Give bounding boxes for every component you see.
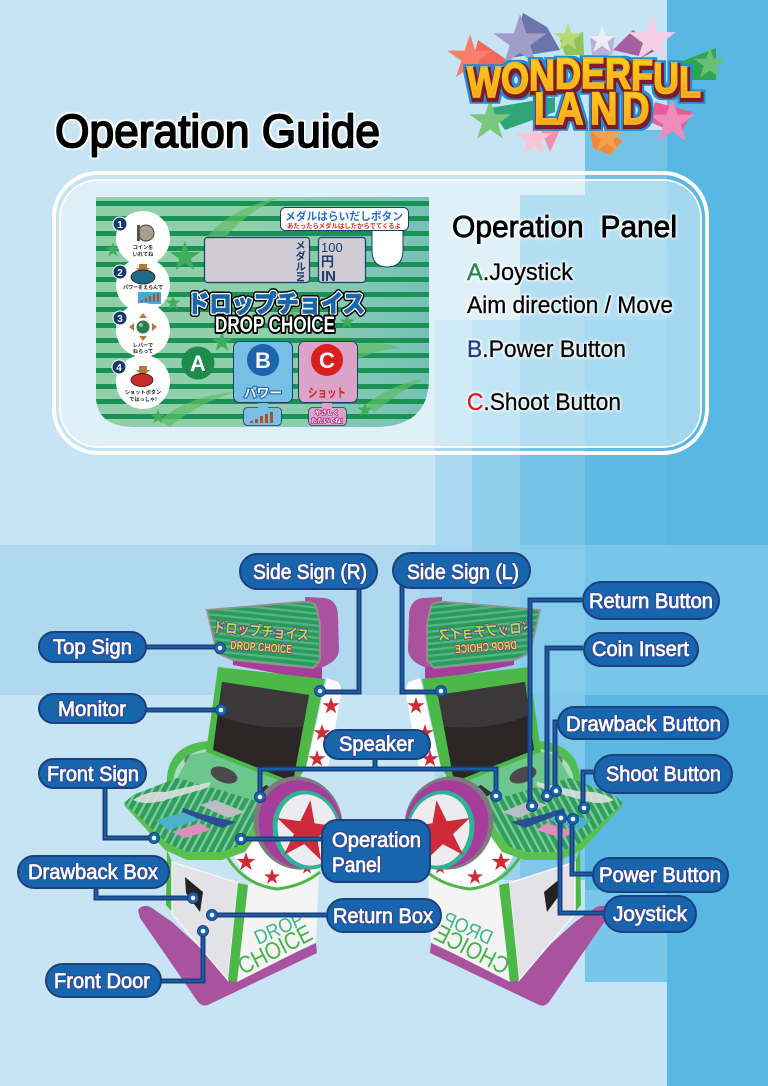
panel legend text: Aim direction / Move bbox=[467, 292, 673, 319]
callout: Joystick: Joystick bbox=[613, 903, 687, 926]
callout: Speaker: Speaker bbox=[339, 733, 414, 756]
100 yen slot: IN bbox=[321, 268, 336, 285]
callout: Top Sign: Top Sign bbox=[53, 636, 132, 659]
callout: Coin Insert bbox=[542, 633, 698, 802]
step 3: aim with lever: レバーで bbox=[133, 342, 153, 349]
medal payout button label: あたったらメダルはしたからでてくるよ bbox=[287, 221, 401, 230]
callout: Monitor: Monitor bbox=[58, 698, 126, 721]
callout: Shoot Button bbox=[578, 755, 732, 814]
medal payout button label: メダルはらいだしボタン bbox=[285, 209, 403, 223]
callout: Operation Panel bbox=[236, 820, 430, 882]
game logo: Drop Choice: ドロップチョイス bbox=[187, 291, 365, 318]
button B: power bbox=[234, 342, 292, 426]
game logo: Drop Choice bbox=[187, 291, 365, 337]
cabinet: left machine: DROP bbox=[251, 908, 308, 950]
medal in slot: メダルIN bbox=[294, 240, 306, 282]
button C: shoot: ショット bbox=[308, 386, 346, 400]
cabinet: right machine (mirrored): ドロップチョイス bbox=[437, 619, 534, 644]
callout: Side Sign (R): Side Sign (R) bbox=[253, 561, 367, 584]
callout: Side Sign (L): Side Sign (L) bbox=[407, 561, 519, 584]
logo: Wonderful Land bbox=[447, 13, 726, 155]
callout: Power Button bbox=[568, 814, 728, 892]
panel legend text: A.Joystick bbox=[467, 259, 574, 286]
game logo: Drop Choice: ドロップチョイス bbox=[187, 291, 365, 318]
button B: power: パワー bbox=[244, 386, 282, 400]
cabinet: right machine (mirrored) bbox=[391, 597, 623, 1006]
medal payout button label bbox=[280, 208, 408, 267]
striped green background bbox=[96, 197, 429, 428]
panel: operation panel frame bbox=[54, 173, 707, 453]
callout: Power Button: Power Button bbox=[599, 864, 721, 887]
callout: Shoot Button: Shoot Button bbox=[606, 763, 721, 786]
step 1: insert coin: 1 bbox=[117, 220, 123, 231]
button A marker: A bbox=[190, 351, 206, 376]
cabinet: right machine (mirrored): DROP CHOICE bbox=[454, 638, 517, 656]
cabinet: right machine (mirrored): CHOICE bbox=[430, 920, 514, 980]
step 2: choose power: パワーをえらんで bbox=[123, 284, 163, 291]
game logo: Drop Choice: ドロップチョイス bbox=[187, 291, 365, 318]
title: Operation Guide: Operation Guide bbox=[55, 105, 380, 157]
step 3: aim with lever bbox=[113, 303, 170, 357]
wordmark bbox=[467, 50, 701, 134]
cabinet: left machine bbox=[124, 597, 356, 1006]
wordmark: WONDERFUL bbox=[467, 50, 701, 107]
callout: Drawback Box bbox=[18, 856, 198, 904]
step 4: press shoot: 4 bbox=[116, 363, 122, 374]
callout: Monitor bbox=[39, 694, 226, 723]
step 2: choose power bbox=[113, 258, 170, 312]
step 1: insert coin: コインを bbox=[133, 243, 153, 251]
100 yen slot: 円 bbox=[321, 254, 334, 269]
button C: shoot: C bbox=[319, 348, 335, 373]
panel legend text: Operation Panel bbox=[452, 209, 677, 244]
cabinet: left machine: ドロップチョイス bbox=[213, 619, 310, 644]
callout: Side Sign (L) bbox=[393, 553, 530, 696]
panel legend text: C.Shoot Button bbox=[467, 389, 621, 416]
step 4: press shoot: ではっしゃ! bbox=[129, 396, 157, 403]
100 yen slot: 100 bbox=[321, 240, 343, 255]
step 1: insert coin bbox=[113, 211, 170, 265]
callout: Operation Panel: Operation bbox=[332, 829, 421, 852]
callout: Front Sign bbox=[39, 759, 160, 844]
stars behind the logo wordmark bbox=[447, 13, 726, 155]
step 2: choose power: 2 bbox=[117, 268, 123, 279]
wordmark: LAND bbox=[534, 83, 649, 134]
callout: Drawback Box: Drawback Box bbox=[28, 861, 158, 884]
button B: power: B bbox=[255, 348, 271, 373]
panel legend text bbox=[452, 209, 677, 416]
cabinet: left machine: DROP CHOICE bbox=[230, 638, 293, 656]
callout: Speaker bbox=[254, 730, 502, 802]
callout: Drawback Button: Drawback Button bbox=[566, 713, 721, 736]
button A marker bbox=[182, 346, 214, 380]
game logo: Drop Choice: DROP CHOICE bbox=[215, 312, 335, 337]
100 yen slot bbox=[318, 238, 366, 285]
step 4: press shoot: ショットボタン bbox=[125, 388, 161, 396]
callout: Return Box bbox=[206, 899, 441, 932]
step 1: insert coin: いれてね bbox=[133, 251, 154, 258]
callout: Drawback Button bbox=[550, 707, 728, 796]
button C: shoot: やさしく bbox=[315, 409, 339, 417]
callout: Front Door bbox=[46, 926, 208, 997]
callout: Return Button: Return Button bbox=[589, 590, 713, 613]
callout: Coin Insert: Coin Insert bbox=[592, 638, 689, 661]
step 3: aim with lever: ねらって bbox=[133, 348, 153, 355]
step 3: aim with lever: 3 bbox=[117, 314, 123, 325]
callout: Front Sign: Front Sign bbox=[47, 763, 139, 786]
medal in slot bbox=[204, 238, 310, 282]
callout: Operation Panel: Panel bbox=[332, 854, 381, 877]
panel legend text: B.Power Button bbox=[467, 336, 626, 363]
cabinet: left machine: CHOICE bbox=[233, 920, 317, 980]
step 4: press shoot bbox=[112, 355, 170, 409]
button C: shoot: たたいてね! bbox=[311, 417, 343, 425]
callout: Side Sign (R) bbox=[240, 554, 377, 696]
callout: Joystick bbox=[556, 812, 696, 932]
callout: Top Sign bbox=[39, 632, 226, 662]
panel art: control panel sticker bbox=[96, 197, 429, 428]
callout: Front Door: Front Door bbox=[54, 970, 150, 993]
callout: Return Button bbox=[526, 582, 719, 812]
button C: shoot bbox=[298, 342, 358, 426]
cabinet: right machine (mirrored): DROP bbox=[439, 908, 496, 950]
callout: Return Box: Return Box bbox=[333, 905, 433, 928]
